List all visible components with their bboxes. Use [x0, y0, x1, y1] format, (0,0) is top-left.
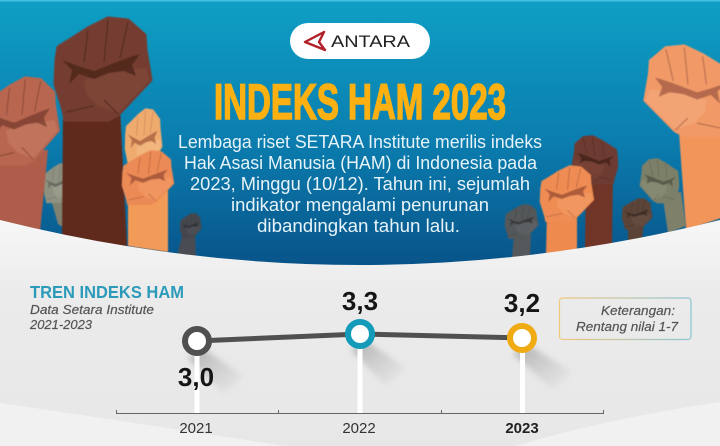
icon: grey fist center right — [505, 205, 538, 258]
callout: legend: Rentang nilai 1-7 — [576, 320, 679, 334]
decorative lighter lower-right wave — [515, 402, 720, 446]
value labels: 3,3 — [342, 286, 378, 316]
point shadows — [188, 342, 572, 394]
top light strip — [0, 0, 720, 2]
year labels: 2022 — [342, 420, 376, 437]
stems — [194, 348, 525, 413]
heading: chart title: TREN INDEKS HAM — [30, 282, 184, 302]
year labels: 2023 — [505, 420, 539, 437]
text block: intro paragraph: Hak Asasi Manusia (HAM) di Indonesia pada — [184, 153, 538, 173]
point 2023 — [510, 326, 534, 350]
decorative lighter lower-left wave — [0, 403, 285, 446]
background: blue sky gradient — [0, 0, 720, 300]
callout: legend — [560, 298, 691, 340]
icon: dark small fist left — [177, 213, 201, 258]
icon: Antara red triangle — [305, 32, 325, 50]
text block: intro paragraph: 2023, Minggu (10/12). Tahun ini, sejumlah — [190, 174, 530, 194]
title: INDEKS HAM 2023 — [214, 74, 506, 130]
x axis — [116, 410, 604, 414]
icon: salmon fist left — [0, 78, 59, 232]
icon: light orange small fist — [125, 109, 162, 170]
line chart: HAM index trend — [116, 286, 604, 437]
value labels: 3,0 — [178, 362, 214, 392]
logo wordmark: ANTARA — [331, 32, 411, 51]
point 2021 — [185, 329, 209, 353]
trend line — [197, 334, 522, 341]
year labels — [179, 420, 539, 437]
icon: small grey-olive fist left — [43, 164, 74, 228]
icon: dark brown small fist right — [622, 199, 652, 241]
text block: chart subtitle — [29, 303, 154, 332]
panel: lower chart background — [0, 220, 720, 446]
text block: intro paragraph: indikator mengalami penurunan — [231, 195, 489, 215]
year labels: 2021 — [179, 420, 213, 437]
icon: orange fist left — [123, 151, 173, 252]
icon: orange fist center right — [541, 166, 593, 255]
callout: legend: Keterangan: — [601, 304, 675, 318]
icon: olive fist right — [640, 159, 686, 233]
text block: intro paragraph: dibandingkan tahun lalu. — [257, 216, 460, 236]
text block: intro paragraph: Lembaga riset SETARA Institute merilis indeks — [178, 132, 542, 152]
text block: chart subtitle: 2021-2023 — [29, 318, 92, 332]
point 2022 — [348, 322, 372, 346]
logo: Antara pill — [290, 23, 430, 59]
icon: brown fist center right — [572, 136, 618, 249]
value labels — [178, 286, 540, 392]
text block: intro paragraph — [178, 132, 542, 236]
icon: big brown fist — [55, 18, 151, 248]
icon: big peach fist right — [645, 46, 720, 230]
text block: chart subtitle: Data Setara Institute — [30, 303, 154, 317]
value labels: 3,2 — [504, 288, 540, 318]
